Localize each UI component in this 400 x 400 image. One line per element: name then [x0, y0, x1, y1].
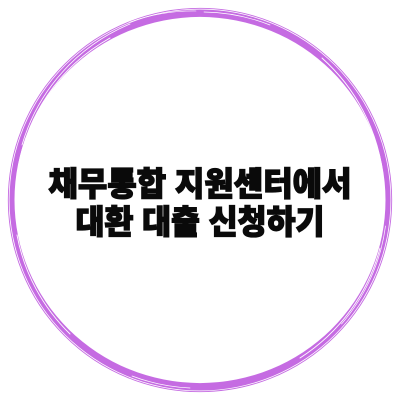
title [48, 166, 352, 240]
title line 2: 대환 대출 신청하기 [76, 204, 324, 240]
title line 1: 채무통합 지원센터에서 [48, 166, 352, 202]
